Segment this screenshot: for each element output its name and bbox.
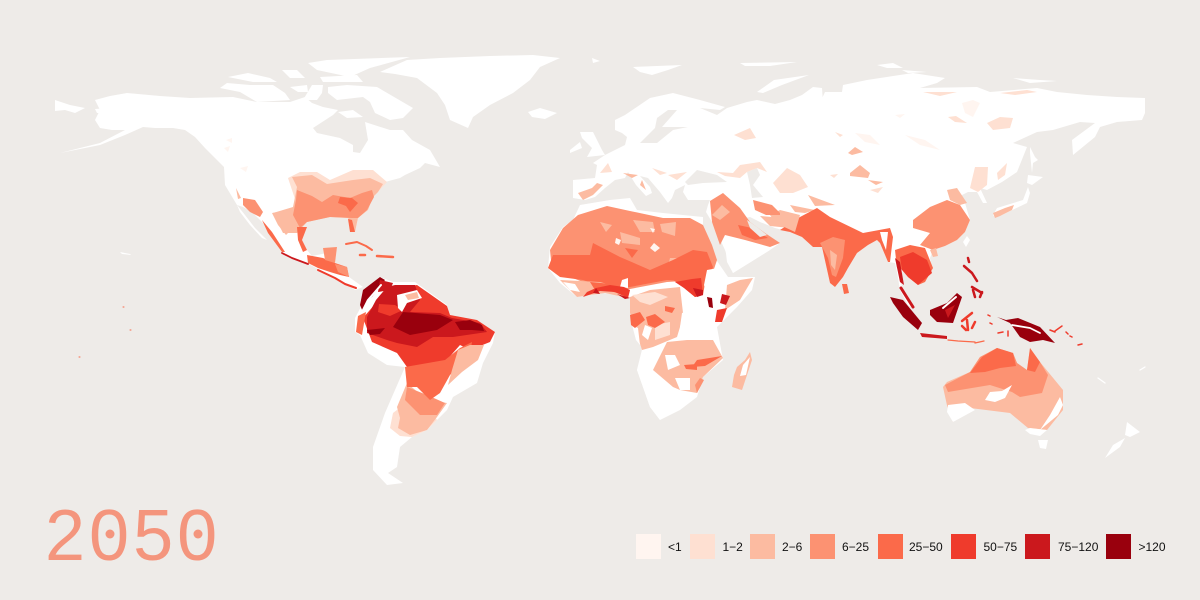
legend item: 1 to 2 bbox=[690, 534, 743, 559]
map region: South America bbox=[355, 277, 495, 485]
map region: Northern islands and Japan bbox=[570, 58, 1057, 247]
Canada faint patches bbox=[224, 138, 248, 172]
legend item: more than 120: >120 bbox=[1138, 540, 1166, 554]
map region: Tasmania and New Zealand bbox=[1038, 422, 1140, 458]
map region: Eurasia bbox=[573, 73, 1145, 308]
legend item: 25 to 50 bbox=[878, 534, 943, 559]
map region: Australia bbox=[943, 348, 1063, 436]
map region: Maritime Southeast Asia bbox=[890, 258, 1145, 383]
legend bbox=[636, 534, 1166, 559]
legend item: less than 1 bbox=[636, 534, 682, 559]
legend item: 50 to 75: 50−75 bbox=[984, 540, 1018, 554]
legend item: less than 1: <1 bbox=[668, 540, 682, 554]
map region: North America bbox=[55, 57, 440, 290]
Mexico and Central America bbox=[243, 198, 263, 217]
Europe and Central Asia low-risk patches bbox=[578, 147, 883, 222]
legend item: more than 120 bbox=[1106, 534, 1166, 559]
Sri Lanka bbox=[842, 284, 849, 294]
title: year: 2050 bbox=[45, 496, 221, 576]
legend item: 25 to 50: 25−50 bbox=[909, 540, 943, 554]
map region: Africa bbox=[548, 198, 755, 420]
East Asia bbox=[947, 188, 967, 205]
map region: Greenland and Iceland bbox=[380, 55, 560, 128]
legend item: 1 to 2: 1−2 bbox=[722, 540, 743, 554]
legend item: 75 to 120: 75−120 bbox=[1058, 540, 1099, 554]
legend item: 2 to 6: 2−6 bbox=[782, 540, 803, 554]
Middle East bbox=[710, 193, 780, 247]
South Asia bbox=[780, 208, 893, 287]
Southeast Asia mainland bbox=[895, 245, 933, 285]
map region: Madagascar bbox=[732, 352, 752, 390]
legend item: 75 to 120 bbox=[1025, 534, 1099, 559]
US choropleth bbox=[288, 170, 387, 205]
Pacific island dots bbox=[79, 307, 131, 357]
panel: world map bbox=[55, 55, 1145, 485]
legend item: 6 to 25: 6−25 bbox=[842, 540, 869, 554]
Caribbean islands bbox=[346, 242, 372, 250]
Malay peninsula bbox=[901, 288, 913, 307]
legend item: 2 to 6 bbox=[750, 534, 803, 559]
legend item: 50 to 75 bbox=[951, 534, 1018, 559]
legend item: 6 to 25 bbox=[810, 534, 869, 559]
